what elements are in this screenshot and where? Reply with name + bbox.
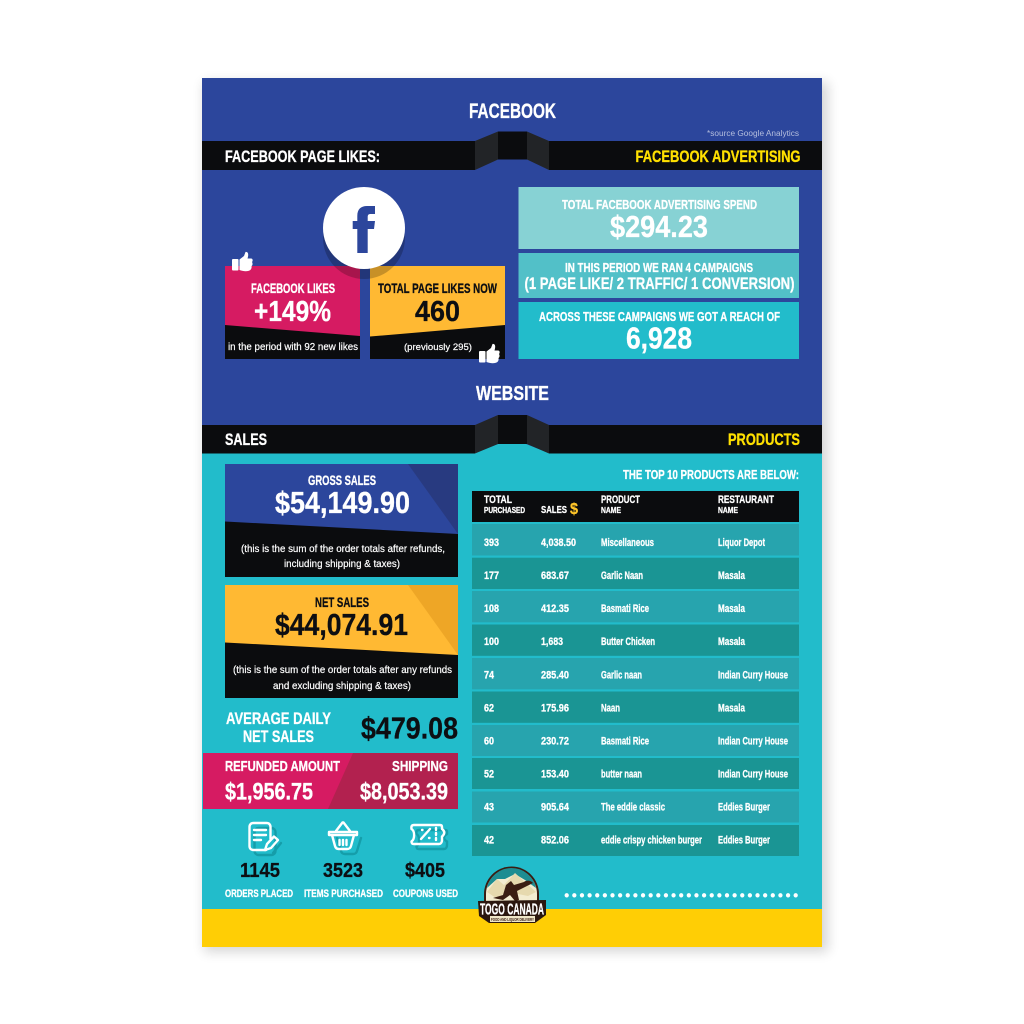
logo: Togo Canada: FOOD AND LIQUOR DELIVERY <box>491 917 534 922</box>
row 4: 100 <box>484 636 499 648</box>
row 5: Garlic naan <box>601 670 642 682</box>
row 10 <box>472 825 799 856</box>
row 7: 230.72 <box>541 736 569 748</box>
row 9: The eddie classic <box>601 802 665 814</box>
stat: average daily net sales: AVERAGE DAILY <box>226 709 331 728</box>
stat: coupons used: $405 <box>405 859 445 882</box>
row 3: Masala <box>718 603 746 615</box>
card: Facebook likes: in the period with 92 new likes <box>228 342 358 353</box>
card: gross sales <box>225 464 458 577</box>
card: net sales: and excluding shipping & taxes) <box>273 681 411 692</box>
heading: Website: WEBSITE <box>476 383 549 405</box>
row 5: Indian Curry House <box>718 670 788 682</box>
icon: thumbs up right <box>479 344 500 363</box>
row 9: 43 <box>484 802 494 814</box>
card: total page likes <box>370 266 505 359</box>
logo: Togo Canada <box>478 867 546 923</box>
row 5: 74 <box>484 670 495 682</box>
stat: coupons used <box>393 825 458 900</box>
row 7 <box>472 725 799 756</box>
stat: average daily net sales: NET SALES <box>243 727 314 746</box>
row 6: Naan <box>601 702 620 714</box>
row 7: Indian Curry House <box>718 736 788 748</box>
row 9: 905.64 <box>541 802 570 814</box>
table header: RESTAURANT <box>718 494 774 506</box>
panel: campaign reach: ACROSS THESE CAMPAIGNS WE GOT A REACH OF <box>539 309 780 324</box>
page background <box>202 78 822 947</box>
panel: campaign reach <box>518 302 799 359</box>
panel: refunded amount and shipping: $8,053.39 <box>360 778 448 806</box>
row 1 <box>472 524 799 556</box>
row 10: 852.06 <box>541 834 569 846</box>
panel: campaign reach: 6,928 <box>626 320 692 356</box>
card: total page likes: (previously 295) <box>404 342 472 353</box>
card: net sales: (this is the sum of the order totals after any refunds <box>233 665 452 676</box>
row 6 <box>472 692 799 723</box>
panel: refunded amount and shipping: $1,956.75 <box>225 778 313 806</box>
row 4 <box>472 624 799 656</box>
panel: refunded amount and shipping: REFUNDED AMOUNT <box>225 758 340 775</box>
card: Facebook likes <box>225 266 360 359</box>
source note: *source Google Analytics <box>707 129 799 138</box>
row 1: Miscellaneous <box>601 537 654 549</box>
row 10: 42 <box>484 834 494 846</box>
stat: items purchased <box>304 822 383 900</box>
panel: campaigns: IN THIS PERIOD WE RAN 4 CAMPAIGNS <box>565 260 753 275</box>
ribbon: Facebook section <box>202 132 822 170</box>
ribbon: Facebook section: FACEBOOK ADVERTISING <box>636 148 800 166</box>
table heading: THE TOP 10 PRODUCTS ARE BELOW: <box>623 468 799 482</box>
row 8: 52 <box>484 768 494 780</box>
row 2: 177 <box>484 570 499 582</box>
card: gross sales: (this is the sum of the order totals after refunds, <box>241 544 445 555</box>
row 3: Basmati Rice <box>601 603 649 615</box>
row 2 <box>472 558 799 589</box>
card: gross sales: including shipping & taxes) <box>284 559 400 570</box>
row 4: 1,683 <box>541 636 563 648</box>
stat: items purchased: ITEMS PURCHASED <box>304 888 383 900</box>
card: net sales <box>225 585 458 698</box>
stat: coupons used: COUPONS USED <box>393 888 458 900</box>
row 3: 108 <box>484 603 499 615</box>
card: total page likes: 460 <box>415 296 460 328</box>
table header: $ <box>570 501 578 518</box>
row 8: 153.40 <box>541 768 569 780</box>
row 3: 412.35 <box>541 603 569 615</box>
icon: thumbs up left <box>232 252 253 271</box>
card: net sales: $44,074.91 <box>275 607 408 642</box>
table: top 10 products <box>472 491 799 856</box>
card: Facebook likes: FACEBOOK LIKES <box>251 280 335 296</box>
stat: orders placed: ORDERS PLACED <box>225 888 293 900</box>
row 2: Garlic Naan <box>601 570 643 582</box>
stat: orders placed: 1145 <box>240 859 280 882</box>
row 1: 4,038.50 <box>541 537 576 549</box>
ribbon: Website section: PRODUCTS <box>728 431 800 449</box>
row 9: Eddies Burger <box>718 802 770 814</box>
heading: Facebook: FACEBOOK <box>469 100 556 123</box>
logo: Togo Canada: TOGO CANADA <box>480 902 544 918</box>
row 8: Indian Curry House <box>718 768 788 780</box>
row 6: 175.96 <box>541 702 569 714</box>
ribbon: Facebook section: FACEBOOK PAGE LIKES: <box>225 148 380 166</box>
stat: average daily net sales <box>226 709 458 746</box>
row 5 <box>472 658 799 689</box>
row 6: 62 <box>484 702 494 714</box>
ribbon: Website section: SALES <box>225 431 267 449</box>
row 4: Masala <box>718 636 746 648</box>
row 10: eddie crispy chicken burger <box>601 834 702 846</box>
panel: total advertising spend <box>518 187 799 249</box>
card: Facebook likes: +149% <box>254 296 331 328</box>
row 9 <box>472 792 799 822</box>
row 6: Masala <box>718 702 746 714</box>
row 10: Eddies Burger <box>718 834 770 846</box>
row 7: 60 <box>484 736 494 748</box>
table header <box>472 491 799 522</box>
row 8 <box>472 758 799 789</box>
ribbon: Website section <box>202 415 822 454</box>
stat: orders placed <box>225 823 293 900</box>
panel: refunded amount and shipping: SHIPPING <box>392 758 448 775</box>
panel: campaigns <box>518 253 799 298</box>
row 4: Butter Chicken <box>601 636 655 648</box>
table header: PRODUCT <box>601 494 640 506</box>
card: gross sales: $54,149.90 <box>275 485 410 520</box>
card: net sales: NET SALES <box>315 595 369 610</box>
card: gross sales: GROSS SALES <box>308 473 376 488</box>
table header: NAME <box>718 506 739 515</box>
card: total page likes: TOTAL PAGE LIKES NOW <box>378 280 498 296</box>
row 2: 683.67 <box>541 570 569 582</box>
table header: PURCHASED <box>484 506 525 515</box>
stat: average daily net sales: $479.08 <box>361 710 458 746</box>
panel: total advertising spend: $294.23 <box>610 209 708 244</box>
row 3 <box>472 591 799 622</box>
icon: Facebook logo <box>323 187 405 279</box>
row 1: 393 <box>484 537 499 549</box>
dotted line <box>567 893 796 897</box>
row 1: Liquor Depot <box>718 537 765 549</box>
row 8: butter naan <box>601 768 642 780</box>
panel: refunded amount and shipping <box>203 753 458 809</box>
row 7: Basmati Rice <box>601 736 649 748</box>
table header: SALES <box>541 504 567 516</box>
panel: campaigns: (1 PAGE LIKE/ 2 TRAFFIC/ 1 CONVERSION) <box>524 274 794 293</box>
row 2: Masala <box>718 570 746 582</box>
table header: TOTAL <box>484 494 512 506</box>
row 5: 285.40 <box>541 670 569 682</box>
stat: items purchased: 3523 <box>323 859 363 882</box>
panel: total advertising spend: TOTAL FACEBOOK ADVERTISING SPEND <box>562 197 757 212</box>
table header: NAME <box>601 506 622 515</box>
